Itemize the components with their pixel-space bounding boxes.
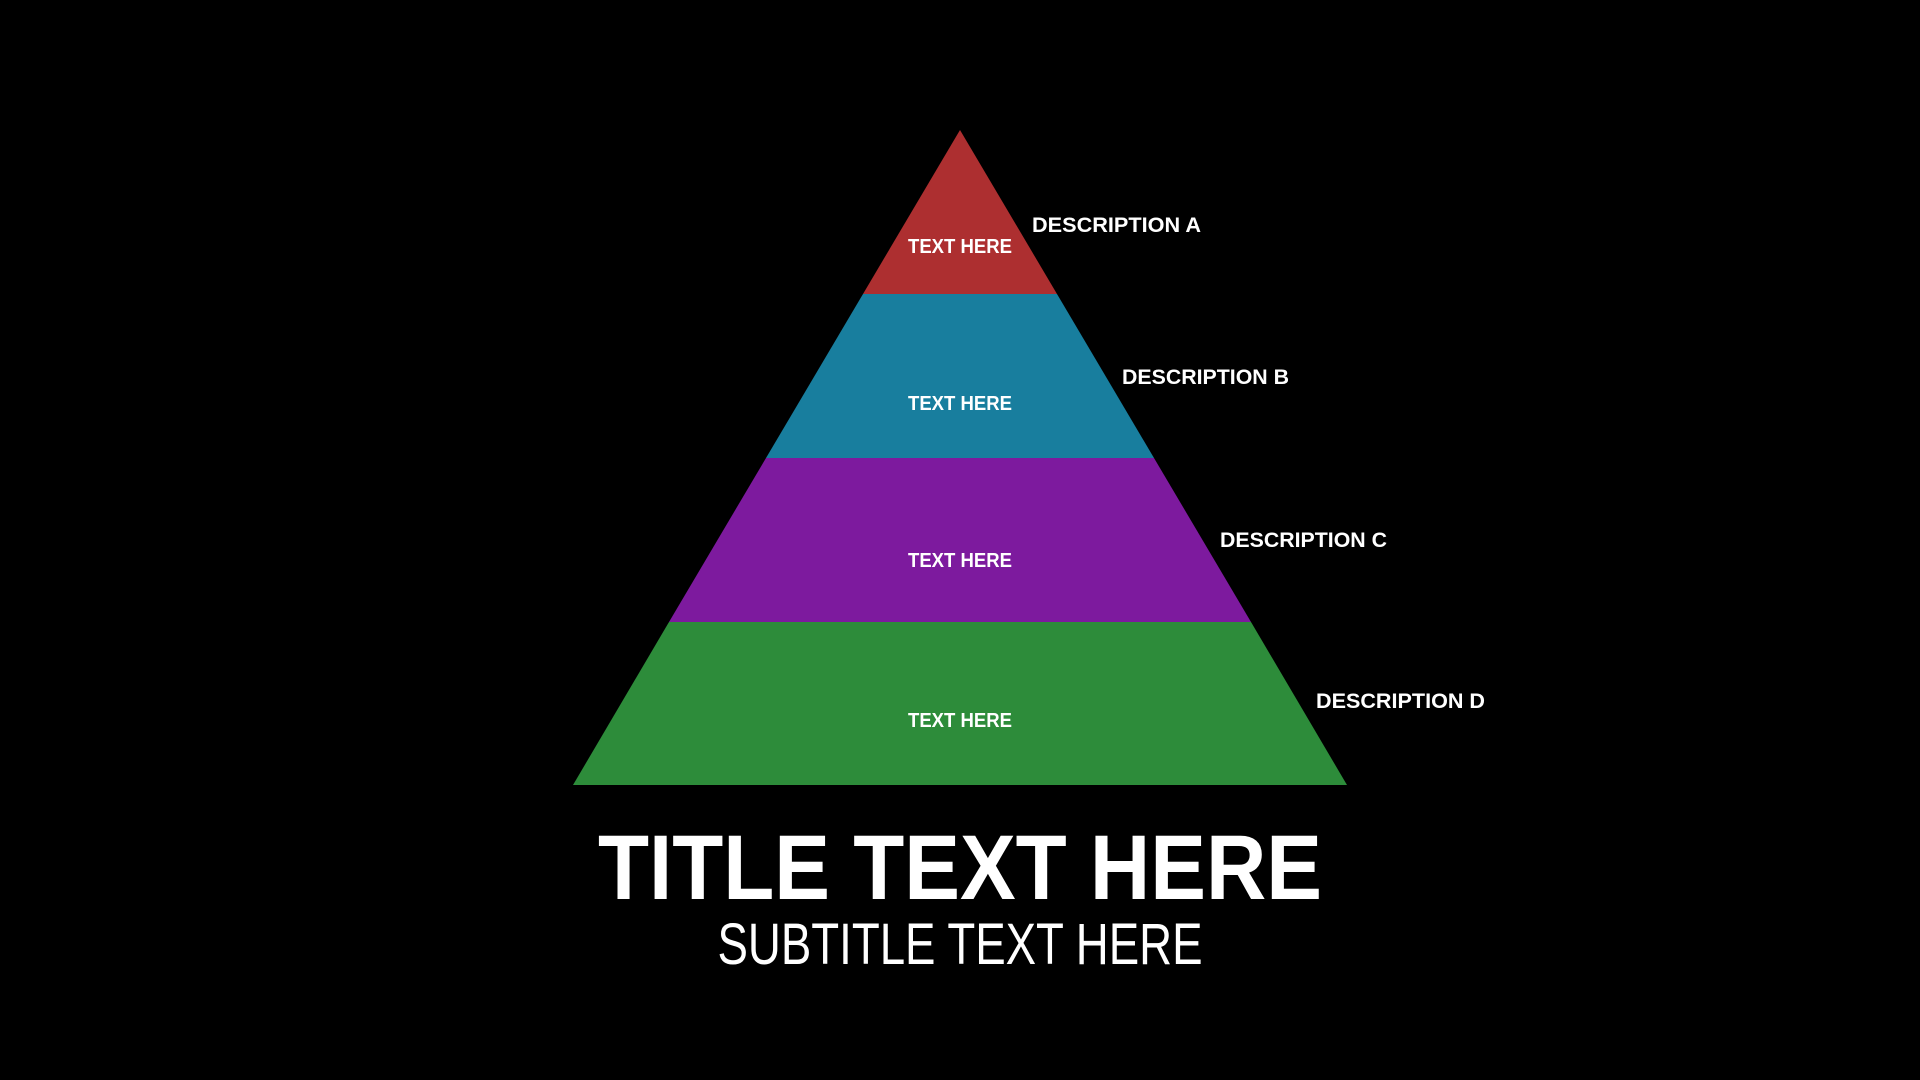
tier D: green: TEXT HERE [908, 710, 1012, 732]
tier D: green [573, 622, 1347, 785]
tier B: teal: TEXT HERE [908, 393, 1012, 415]
description A: DESCRIPTION A [1032, 214, 1201, 237]
tier A: red [863, 130, 1057, 294]
tier A: red: TEXT HERE [908, 236, 1012, 258]
description C: DESCRIPTION C [1220, 529, 1387, 552]
pyramid [573, 130, 1347, 785]
description D: DESCRIPTION D [1316, 690, 1485, 713]
tier B: teal [766, 294, 1154, 458]
tier C: purple: TEXT HERE [908, 550, 1012, 572]
title: TITLE TEXT HERE [598, 817, 1322, 919]
subtitle: SUBTITLE TEXT HERE [718, 912, 1202, 977]
tier C: purple [669, 458, 1251, 622]
description B: DESCRIPTION B [1122, 366, 1289, 389]
